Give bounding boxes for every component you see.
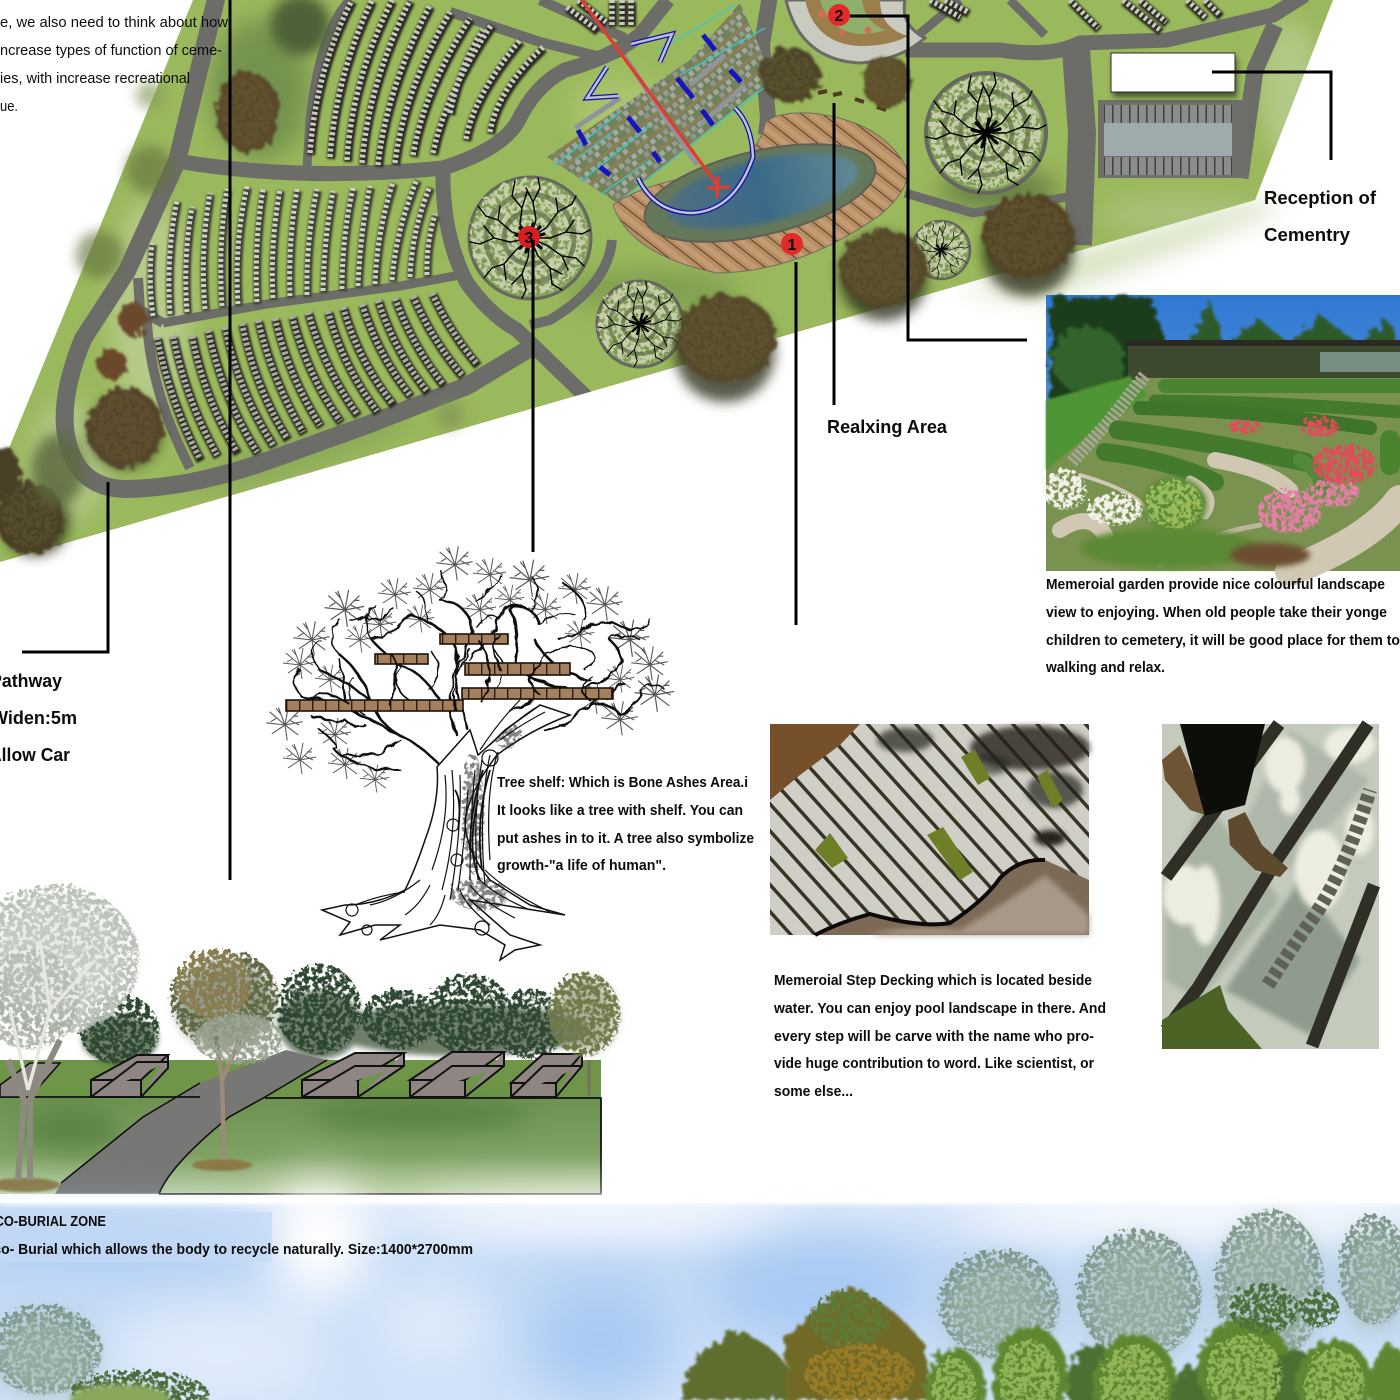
branches <box>597 281 683 367</box>
flower bed mid <box>1143 477 1207 533</box>
text: intro (upper left): ue. <box>0 98 18 115</box>
front foot <box>1228 812 1288 877</box>
foliage speckle <box>914 223 968 277</box>
central planting <box>547 3 770 203</box>
arc inner <box>638 108 753 213</box>
ground left <box>0 1097 200 1194</box>
label panel tint <box>0 1207 272 1262</box>
left tree crown <box>0 885 140 1050</box>
planting grid <box>547 3 767 203</box>
caption: memorial steps <box>773 973 1106 1100</box>
site plan <box>0 0 1333 562</box>
grass tufts <box>0 1159 252 1192</box>
axis arrow <box>578 0 730 198</box>
caption: memorial steps: Memeroial Step Decking which is located beside <box>774 973 1092 989</box>
tree planting east 2 <box>862 56 912 108</box>
reception building <box>1111 53 1235 92</box>
label: reception: Reception of <box>1264 187 1377 208</box>
misty trees back <box>0 1210 1400 1395</box>
reception plaza <box>1104 123 1232 156</box>
tree corner 3 <box>0 447 21 503</box>
number marker 3 <box>518 226 540 248</box>
paving <box>1060 460 1400 571</box>
photo: foot on stepping stones <box>1162 724 1379 1049</box>
trunk fill <box>322 705 570 960</box>
shelf 2 <box>462 688 613 699</box>
green flower bed <box>1147 481 1203 529</box>
mid green foliage <box>1230 1285 1340 1335</box>
small tree left solid <box>70 1384 170 1400</box>
earth corner <box>770 724 860 800</box>
caption: memorial steps: water. You can enjoy pool landscape in there. And <box>773 1001 1106 1017</box>
text: intro (upper left): e, we also need to think about how <box>0 14 228 31</box>
left slope hedge <box>1046 376 1148 470</box>
rock base <box>815 860 1089 935</box>
number marker 3: 3 <box>525 230 534 247</box>
caption: memorial steps: some else... <box>774 1084 853 1100</box>
sunlight patches <box>1163 727 1375 945</box>
caption: tree shelf: It looks like a tree with shelf. You can <box>497 803 743 819</box>
garden outer ring <box>786 0 925 63</box>
eco-burial section drawing <box>0 885 621 1194</box>
right tree <box>549 973 621 1095</box>
moss patches <box>815 750 1063 880</box>
left tree boughs <box>10 940 95 1090</box>
cyan grid lines <box>553 5 770 203</box>
graves: upper section <box>310 0 1220 165</box>
number marker 2 <box>828 4 850 26</box>
ground darker bands <box>20 1099 530 1150</box>
tree south 1 <box>676 294 776 382</box>
tree south 2 <box>839 230 927 306</box>
middle tree trunk <box>215 1030 240 1160</box>
photo: memorial garden <box>1043 295 1400 571</box>
circle tree small <box>912 221 970 279</box>
leader lines <box>22 0 1331 880</box>
terraces <box>1105 386 1400 490</box>
graves: upper section shadow <box>311 2 1221 167</box>
box 4 <box>410 1052 504 1097</box>
outline <box>912 221 970 279</box>
path edges <box>61 1060 327 1194</box>
tree brown small 1 <box>118 303 148 335</box>
parking lower <box>1104 157 1232 175</box>
stone base <box>1162 724 1379 1049</box>
blue short bars <box>578 35 741 175</box>
tree left big <box>87 388 163 468</box>
garden centre planting <box>820 0 885 34</box>
rings <box>486 194 574 282</box>
shoe back <box>1162 745 1208 816</box>
trouser leg <box>1180 724 1265 816</box>
tree corner 2 <box>32 434 84 506</box>
number marker 1 <box>781 233 803 255</box>
olive trees centre <box>680 1288 930 1400</box>
shade patches <box>1165 730 1370 1035</box>
caption: memorial garden <box>1045 577 1400 676</box>
flowers red <box>1227 418 1377 485</box>
graves: lower section shadow <box>158 295 478 461</box>
shelf 5 <box>440 634 508 644</box>
tree reception <box>982 194 1074 278</box>
lawn tone patches <box>30 20 1320 520</box>
ground right <box>159 1097 601 1194</box>
blue zigzag <box>587 34 672 98</box>
outline <box>926 73 1046 193</box>
box 1 <box>0 1063 60 1097</box>
left tree trunk <box>8 1040 60 1180</box>
box 2 <box>91 1055 168 1097</box>
rock highlight <box>870 875 1089 935</box>
rings <box>944 91 1028 175</box>
foliage speckle <box>930 77 1042 189</box>
moss <box>1162 985 1262 1049</box>
canopy trees <box>0 0 1074 556</box>
circular path arc <box>638 108 753 213</box>
caption: memorial garden: view to enjoying. When old people take their yonge <box>1046 605 1387 621</box>
caption: tree shelf: put ashes in to it. A tree also symbolize <box>497 831 754 847</box>
caption: tree shelf <box>497 775 754 874</box>
sky <box>1046 295 1400 571</box>
text: intro (upper left): ncrease types of function of ceme- <box>0 42 222 59</box>
box 5 <box>511 1054 582 1097</box>
middle tree crown <box>170 950 285 1065</box>
text: intro (upper left): ies, with increase recreational <box>0 70 190 87</box>
background trees <box>80 965 565 1065</box>
misty trees back solid <box>0 1220 1400 1395</box>
branches <box>926 73 1046 193</box>
ground outline <box>0 1097 601 1194</box>
memorial garden <box>786 0 925 63</box>
branches over shelves <box>315 635 590 710</box>
slats <box>770 724 1089 935</box>
caption: tree shelf: growth-"a life of human". <box>497 858 666 874</box>
caption: memorial steps: every step will be carve with the name who pro- <box>774 1029 1094 1045</box>
trunk dark texture <box>452 723 527 911</box>
branches <box>470 178 590 298</box>
graves: middle section <box>150 179 435 316</box>
circle tree 3 <box>469 177 591 299</box>
label: reception: Cementry <box>1264 224 1351 245</box>
background tree mass solid <box>82 991 590 1064</box>
pergola <box>1125 340 1400 378</box>
pond water <box>659 138 865 244</box>
roads <box>65 0 1305 489</box>
small tree left <box>70 1371 210 1400</box>
zigzag inner <box>587 34 672 98</box>
canopy leaf texture <box>2 52 1068 548</box>
sky clouds <box>110 1180 1400 1400</box>
tree shadows <box>1 204 1074 556</box>
rings <box>610 294 670 354</box>
bottom perspective <box>0 1180 1400 1400</box>
background trees <box>1050 297 1396 410</box>
number marker 1: 1 <box>788 237 797 254</box>
flowers white <box>1043 470 1143 526</box>
foliage speckle <box>599 283 681 365</box>
trunk hatching <box>346 700 550 935</box>
tree brown small 2 <box>97 349 127 379</box>
shelf 3 <box>465 663 570 675</box>
pond surround <box>636 126 884 260</box>
box 3 <box>302 1053 404 1097</box>
tree dark green top <box>270 0 330 55</box>
tree shelf illustration <box>266 546 674 960</box>
carved lettering <box>1268 790 1370 985</box>
path <box>55 1050 327 1194</box>
outline <box>597 281 683 367</box>
stepping stones <box>795 91 886 110</box>
gravel strips <box>1166 724 1374 1046</box>
number marker 2: 2 <box>835 8 844 25</box>
caption: eco-burial <box>0 1214 473 1258</box>
shelf 1 <box>286 700 463 711</box>
tree corner <box>0 482 64 554</box>
label: pathway <box>0 670 77 765</box>
parking upper <box>1104 105 1232 123</box>
photo: memorial steps <box>770 724 1090 935</box>
grey paths in planting <box>575 55 745 165</box>
white band top <box>0 1196 1400 1204</box>
tree planting east <box>760 47 820 103</box>
twig tufts <box>266 546 674 793</box>
reception forecourt <box>1098 100 1248 178</box>
branches main <box>295 570 665 770</box>
flowers <box>818 10 872 35</box>
green trees right <box>925 1320 1400 1400</box>
shelf 4 <box>375 654 428 664</box>
lower beds <box>1080 528 1260 568</box>
tree shadows <box>877 726 1090 846</box>
faint trees on lawn <box>76 81 464 429</box>
caption: memorial steps: vide huge contribution to word. Like scientist, or <box>774 1056 1094 1072</box>
label: relaxing area: Realxing Area <box>827 416 948 437</box>
tree top left <box>216 72 280 152</box>
deck <box>613 113 907 273</box>
mulch <box>1230 543 1310 567</box>
stairs <box>1072 375 1145 462</box>
sky <box>0 1203 1400 1400</box>
caption: memorial garden: walking and relax. <box>1045 660 1165 676</box>
sky deeper blue <box>0 1218 930 1400</box>
mid ground grass <box>0 1060 601 1098</box>
circle tree lower <box>597 281 683 367</box>
circle tree right <box>926 73 1046 193</box>
caption: tree shelf: Tree shelf: Which is Bone Ashes Area.i <box>497 775 748 791</box>
crack <box>815 860 1045 935</box>
label: reception <box>1264 187 1377 245</box>
graves: lower section <box>157 293 477 459</box>
graves: middle section shadow <box>151 181 436 318</box>
lawn base of site <box>0 0 1333 562</box>
outline <box>469 177 591 299</box>
foliage speckle <box>472 180 588 296</box>
hillside <box>1046 378 1400 571</box>
caption: memorial garden: Memeroial garden provide nice colourful landscape <box>1046 577 1385 593</box>
reception building shadow <box>1113 58 1237 97</box>
text: intro (upper left) <box>0 14 228 115</box>
flowers pink <box>1258 476 1360 534</box>
garden inner lawn <box>805 0 908 46</box>
branches <box>913 222 969 278</box>
green tree highlights <box>933 1335 1365 1400</box>
lawn soft edge halo <box>960 200 1280 300</box>
